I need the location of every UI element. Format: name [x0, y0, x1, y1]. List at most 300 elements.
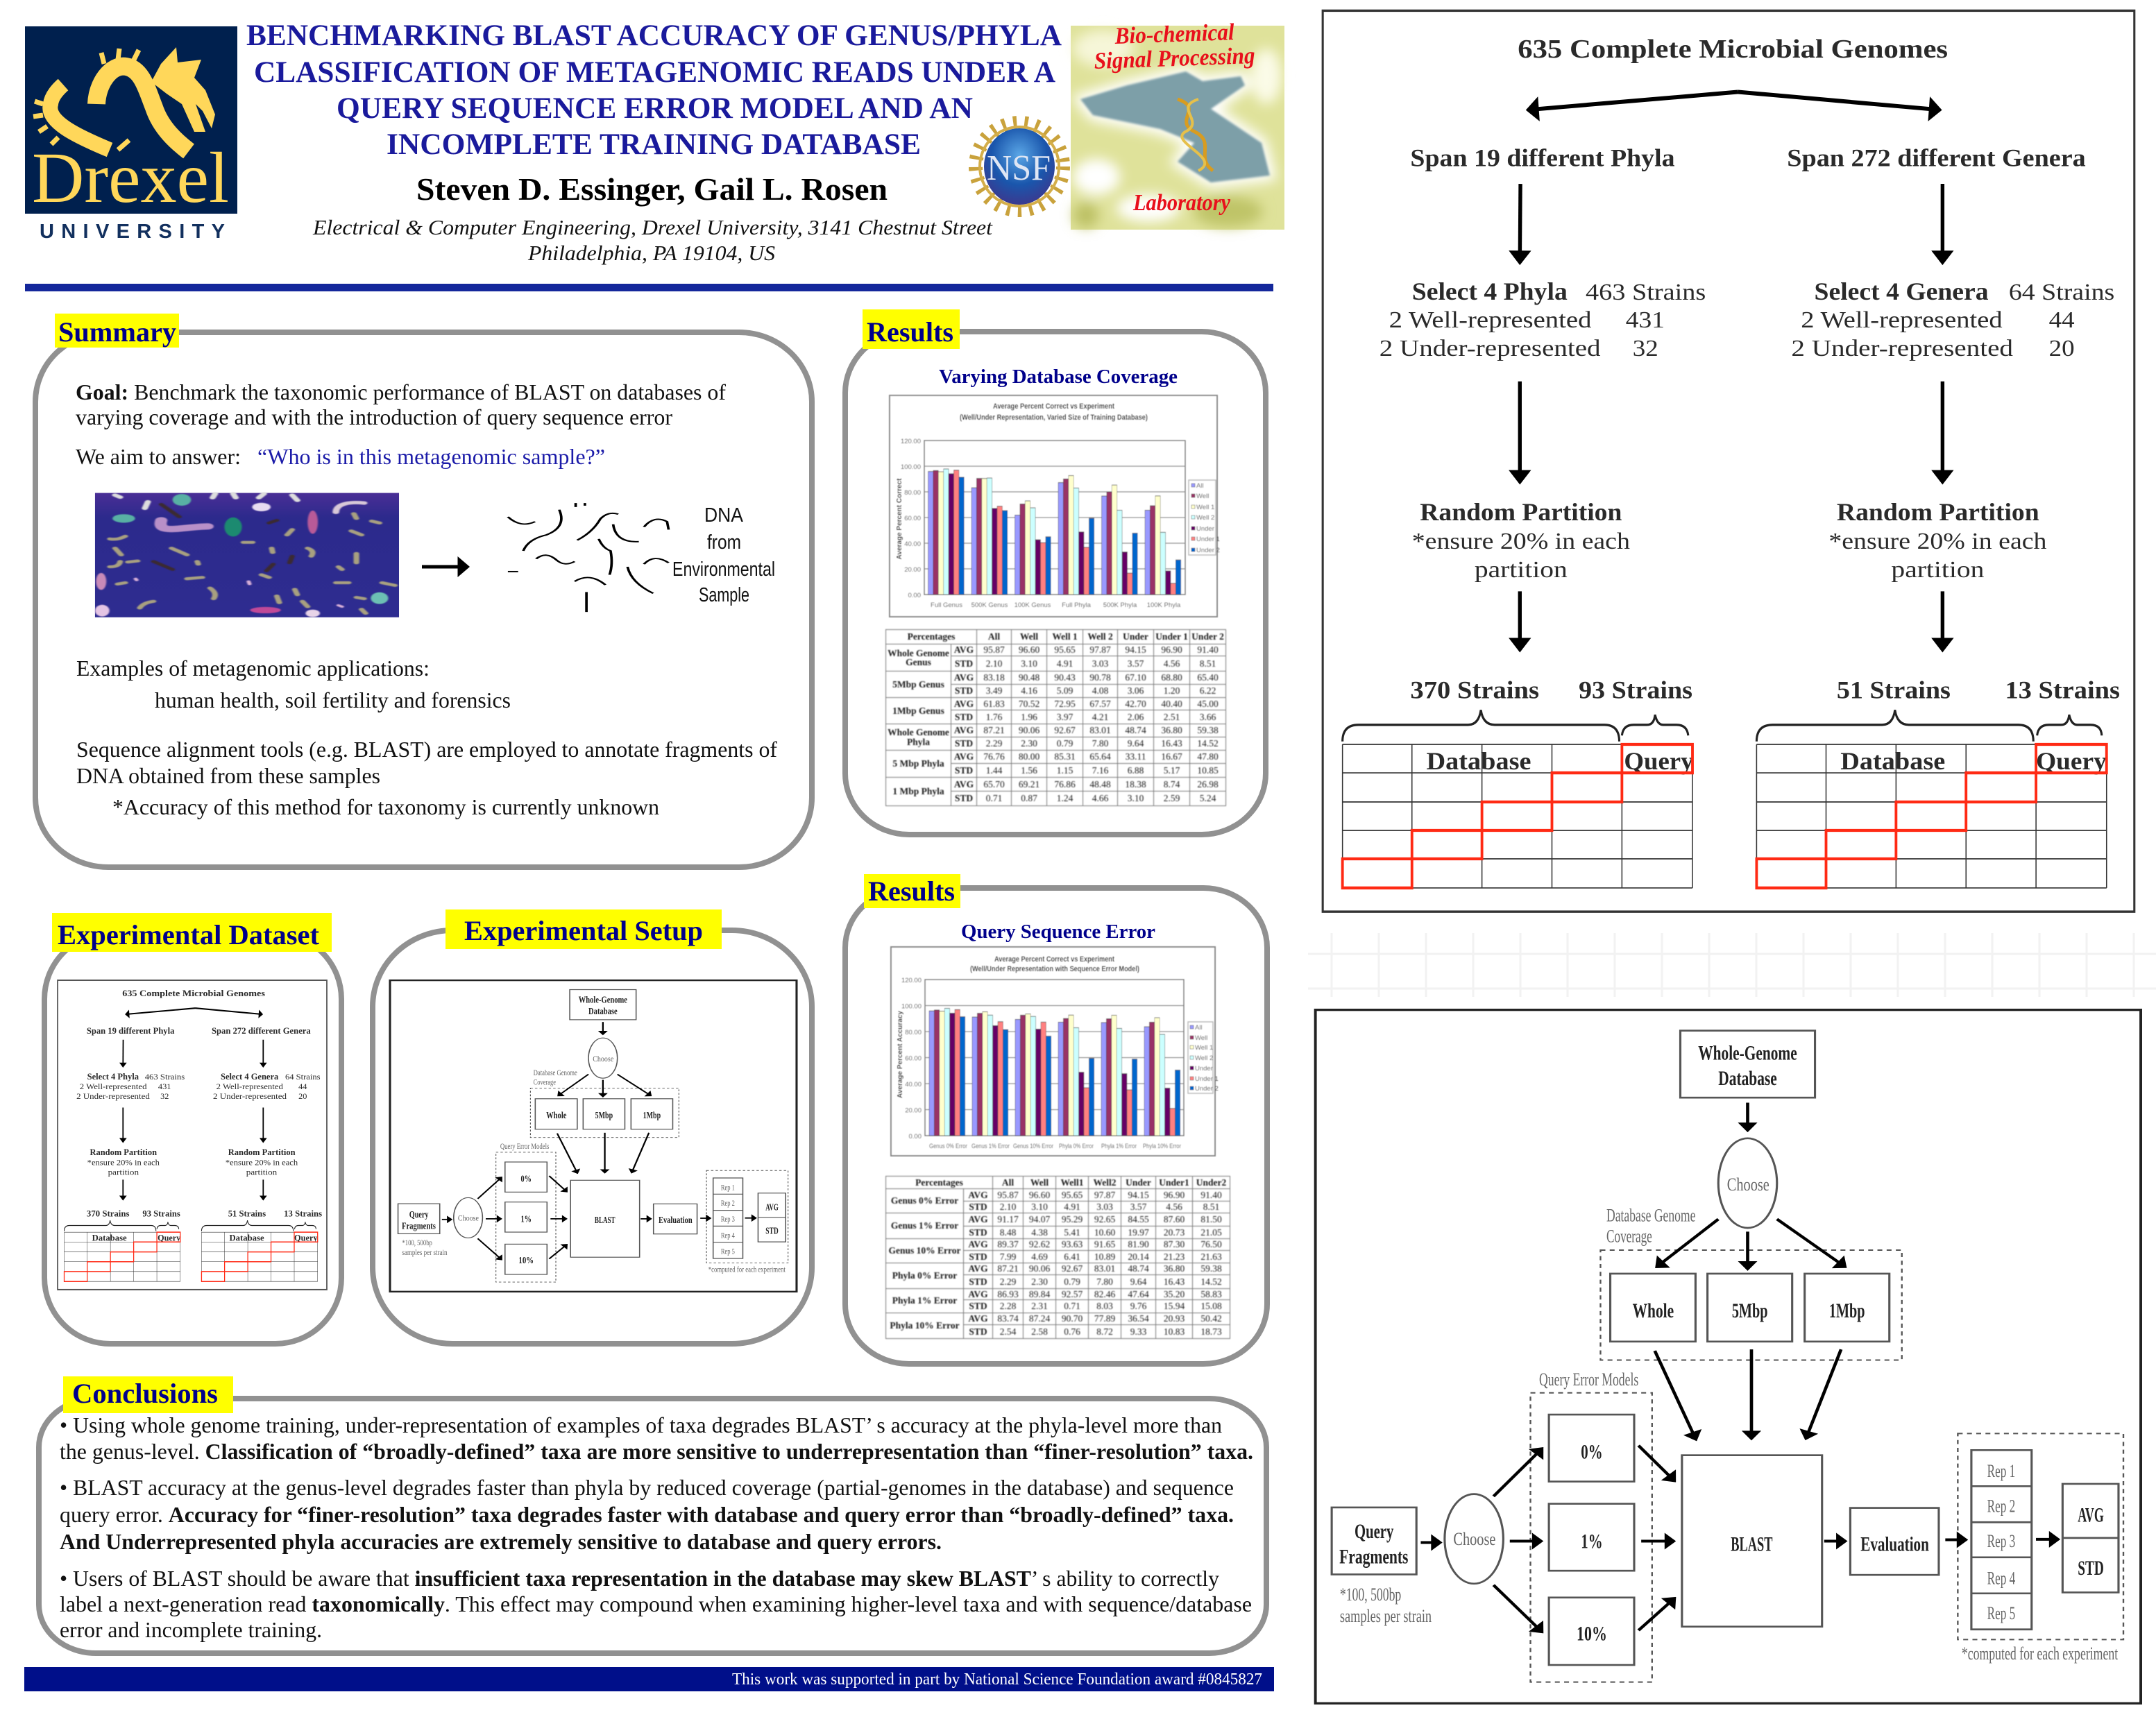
table: query sequence error results: 8.51 — [1203, 1202, 1219, 1212]
table: database coverage results: 4.16 — [1021, 685, 1037, 696]
text block: goal: “Who is in this metagenomic sample?” — [257, 444, 605, 469]
table: query sequence error results: 36.80 — [1164, 1263, 1185, 1274]
table: query sequence error results: 0.79 — [1064, 1276, 1080, 1287]
table: query sequence error results: 0.71 — [1064, 1301, 1080, 1311]
table: database coverage results: Under 1 — [1155, 631, 1188, 642]
bar chart: query sequence error — [891, 947, 1219, 1156]
table: query sequence error results: 3.10 — [1031, 1202, 1048, 1212]
table: database coverage results: 1Mbp Genus — [892, 706, 944, 716]
panel: experimental dataset — [44, 913, 341, 1344]
bar chart: database coverage — [890, 395, 1220, 617]
box labels: 1Mbp — [1829, 1300, 1865, 1322]
affiliation: Electrical & Computer Engineering, Drexel University, 3141 Chestnut Street — [312, 215, 993, 239]
diagram: setup thumbnail: *computed for each experiment — [708, 1265, 786, 1274]
diagram: setup thumbnail: Rep 4 — [721, 1231, 735, 1240]
table: query sequence error results: 2.30 — [1031, 1276, 1048, 1287]
table: query sequence error results: 20.14 — [1128, 1252, 1149, 1262]
diagram: dataset thumbnail: 32 — [160, 1092, 169, 1101]
table: query sequence error results: Phyla 0% Error — [892, 1270, 957, 1281]
table: database coverage results: 1.56 — [1021, 765, 1037, 776]
table: query sequence error results: STD — [969, 1326, 987, 1337]
bar chart: database coverage: 500K Genus — [971, 601, 1008, 609]
table: query sequence error results: 2.28 — [1000, 1301, 1016, 1311]
bar chart: database coverage: All — [1196, 482, 1204, 490]
box labels: 0% — [1581, 1441, 1603, 1463]
table: query sequence error results: 58.83 — [1200, 1289, 1222, 1299]
table: database coverage results: 2.51 — [1164, 712, 1180, 722]
bar chart: query sequence error: Under 2 — [1195, 1085, 1219, 1093]
label: DNA from environmental sample: Environmental — [672, 558, 775, 581]
bar chart: query sequence error: Genus 0% Error — [929, 1143, 967, 1150]
diagram: dataset thumbnail: Select 4 Genera — [221, 1073, 279, 1082]
table: query sequence error results: 9.76 — [1130, 1301, 1146, 1311]
bar chart: query sequence error: Genus 1% Error — [971, 1143, 1010, 1150]
diagram: dataset thumbnail: 370 Strains — [87, 1210, 130, 1218]
bold labels: 51 Strains — [1837, 677, 1951, 704]
regular labels: 32 — [1633, 336, 1658, 361]
text block: applications and tools: Examples of metagenomic applications: — [76, 656, 430, 681]
table: query sequence error results: 87.24 — [1029, 1313, 1050, 1324]
bar chart: query sequence error: (Well/Under Representation with Sequence Error Model) — [970, 965, 1139, 973]
table: query sequence error results: AVG — [968, 1263, 988, 1274]
table: database coverage results: 72.95 — [1054, 699, 1076, 709]
title — [246, 19, 1062, 161]
table: query sequence error results: 4.69 — [1031, 1252, 1048, 1262]
regular labels: 2 Well-represented — [1801, 307, 2003, 333]
table: query sequence error results: Under2 — [1196, 1177, 1226, 1188]
table: query sequence error results: 90.70 — [1062, 1313, 1083, 1324]
table: query sequence error results: 2.58 — [1031, 1326, 1048, 1337]
table: query sequence error results: 92.62 — [1029, 1239, 1050, 1249]
table: database coverage results: 42.70 — [1125, 699, 1146, 709]
bar chart: query sequence error: Phyla 10% Error — [1143, 1143, 1181, 1150]
title: CLASSIFICATION OF METAGENOMIC READS UNDER A — [254, 56, 1055, 89]
diagram: dataset thumbnail: 13 Strains — [284, 1210, 323, 1218]
table: query sequence error results: STD — [969, 1301, 987, 1311]
text block: applications and tools: Sequence alignment tools (e.g. BLAST) are employed to annotate fragments of — [76, 737, 777, 762]
bar chart: database coverage: 120.00 — [901, 438, 921, 445]
table: database coverage results: 3.49 — [986, 685, 1002, 696]
table: query sequence error results: 7.80 — [1096, 1276, 1113, 1287]
table: query sequence error results: 96.60 — [1029, 1190, 1050, 1200]
box labels: 1% — [1581, 1530, 1603, 1553]
icon: Bio-chemical Signal Processing Laboratory logo: Signal Processing — [1094, 43, 1255, 74]
header rule — [25, 284, 1273, 291]
diagram: dataset thumbnail: Random Partition — [90, 1149, 158, 1157]
table: query sequence error results: 2.29 — [1000, 1276, 1016, 1287]
grey annotations: Coverage — [1606, 1227, 1652, 1247]
table: database coverage results: 2.06 — [1128, 712, 1144, 722]
diagram: setup thumbnail: Coverage — [534, 1077, 556, 1086]
table: query sequence error results: 86.93 — [997, 1289, 1019, 1299]
table: database coverage results: 76.76 — [983, 751, 1005, 762]
box labels: BLAST — [1731, 1533, 1773, 1555]
table: database coverage results: 8.51 — [1200, 658, 1216, 669]
diagram: setup thumbnail — [390, 980, 797, 1292]
heading: results: Results — [867, 316, 953, 348]
table: database coverage results: Genus — [906, 657, 931, 667]
table: database coverage results: 45.00 — [1197, 699, 1219, 709]
diagram: setup thumbnail: Rep 5 — [721, 1247, 735, 1256]
grey annotations: Rep 3 — [1987, 1531, 2015, 1552]
icon: Bio-chemical Signal Processing Laboratory logo: Bio-chemical — [1114, 19, 1235, 49]
text block: applications and tools — [76, 656, 777, 819]
diagram: dataset thumbnail: partition — [246, 1168, 278, 1177]
table: query sequence error results: 48.74 — [1128, 1263, 1149, 1274]
icon: Bio-chemical Signal Processing Laboratory logo — [1071, 19, 1284, 230]
table: query sequence error results: 18.73 — [1200, 1326, 1222, 1337]
diagram: dataset thumbnail: 2 Under-represented — [76, 1092, 150, 1101]
table: database coverage results: 59.38 — [1197, 725, 1219, 735]
table: database coverage results: 16.43 — [1161, 738, 1182, 749]
table: database coverage results: STD — [955, 712, 973, 722]
table: query sequence error results: Well2 — [1094, 1177, 1117, 1188]
table: query sequence error results: 36.54 — [1128, 1313, 1149, 1324]
table: database coverage results: 96.60 — [1019, 644, 1039, 655]
table: query sequence error results: 4.56 — [1166, 1202, 1182, 1212]
grey annotations: Rep 1 — [1987, 1461, 2015, 1481]
table: query sequence error results: STD — [969, 1202, 987, 1212]
table: database coverage results: 85.31 — [1054, 751, 1076, 762]
table: database coverage results: AVG — [954, 779, 974, 789]
bar chart: database coverage: Well — [1196, 493, 1209, 500]
heading: experimental setup — [445, 909, 722, 949]
table: database coverage results: 67.57 — [1089, 699, 1111, 709]
table: database coverage results: 80.00 — [1019, 751, 1039, 762]
table: query sequence error results: Under — [1126, 1177, 1151, 1188]
grey annotations: Choose — [1727, 1174, 1769, 1195]
image: bacteria — [95, 493, 399, 617]
table: database coverage results: 1 Mbp Phyla — [892, 786, 944, 796]
label: DNA from environmental sample: from — [707, 531, 741, 554]
text block: applications and tools: *Accuracy of this method for taxonomy is currently unknown — [112, 794, 659, 819]
logo: Drexel University: Drexel — [32, 138, 229, 218]
table: database coverage results: AVG — [954, 699, 974, 709]
table: database coverage results: 3.66 — [1200, 712, 1216, 722]
diagram: setup thumbnail: Database Genome — [534, 1068, 577, 1077]
table: database coverage results: 83.18 — [983, 672, 1005, 683]
bar chart: database coverage: Under — [1196, 525, 1214, 533]
box labels: Fragments — [1339, 1546, 1408, 1568]
regular labels — [1380, 279, 2114, 583]
faint background grid — [1308, 933, 2156, 997]
text block: conclusions: And Underrepresented phyla accuracies are extremely sensitive to database and query errors. — [60, 1529, 942, 1554]
table: database coverage results: 3.06 — [1128, 685, 1144, 696]
table: database coverage results: 87.21 — [983, 725, 1005, 735]
table: database coverage results: 65.64 — [1089, 751, 1111, 762]
table: database coverage results: 3.03 — [1092, 658, 1108, 669]
box labels: 5Mbp — [1732, 1300, 1767, 1322]
logo: Drexel University — [25, 26, 237, 243]
text block: conclusions: the genus-level. Classification of “broadly-defined” taxa are more sensitive to underrepresentation than “finer-resolution” taxa. — [60, 1439, 1253, 1464]
panel: summary — [35, 314, 812, 867]
table: database coverage results: 47.80 — [1197, 751, 1219, 762]
diagram: dataset flow (enlarged) — [1323, 10, 2134, 912]
table: database coverage results: 90.06 — [1019, 725, 1039, 735]
table: query sequence error results: 3.03 — [1096, 1202, 1113, 1212]
bar chart: database coverage: 80.00 — [904, 489, 921, 497]
table: query sequence error results: 91.65 — [1094, 1239, 1115, 1249]
diagram: setup thumbnail: Query — [409, 1210, 429, 1220]
bar chart: database coverage: Full Phyla — [1062, 601, 1092, 609]
table: query sequence error results: 82.46 — [1094, 1289, 1115, 1299]
table: database coverage results: 7.16 — [1092, 765, 1108, 776]
diagram: dataset thumbnail: 51 Strains — [228, 1210, 266, 1218]
table: query sequence error results: Genus 0% Error — [891, 1195, 958, 1206]
table: query sequence error results: STD — [969, 1252, 987, 1262]
diagram: dataset thumbnail: 2 Well-represented — [80, 1082, 147, 1091]
heading: results: Results — [868, 875, 955, 907]
bold labels: Query — [2036, 748, 2107, 775]
text block: conclusions: • BLAST accuracy at the genus-level degrades faster than phyla by reduced coverage (partial-genomes in the database) and sequence — [60, 1475, 1234, 1500]
box labels: STD — [2078, 1557, 2104, 1580]
table: database coverage results: STD — [955, 685, 973, 696]
table: database coverage results: 6.88 — [1128, 765, 1144, 776]
table: database coverage results: 94.15 — [1125, 644, 1146, 655]
diagram: setup thumbnail: STD — [765, 1226, 779, 1236]
arrows — [1420, 1103, 2057, 1631]
table: database coverage results: AVG — [954, 751, 974, 762]
diagram: dataset thumbnail: 20 — [298, 1092, 307, 1101]
table: query sequence error results: 77.89 — [1094, 1313, 1115, 1324]
table: query sequence error results — [885, 1176, 1230, 1339]
text block: conclusions: label a next-generation read taxonomically. This effect may compound when examining higher-level taxa and with sequence/database — [60, 1591, 1252, 1616]
table: database coverage results: 16.67 — [1161, 751, 1182, 762]
bar chart: query sequence error: Under — [1195, 1065, 1213, 1073]
heading: experimental dataset: Experimental Dataset — [58, 919, 320, 950]
table: database coverage results: 8.74 — [1164, 779, 1180, 789]
table: database coverage results: 48.74 — [1125, 725, 1146, 735]
boxes — [1332, 1031, 2123, 1682]
box labels: AVG — [2078, 1504, 2104, 1526]
box labels: Whole-Genome — [1698, 1042, 1797, 1064]
table: query sequence error results: 59.38 — [1200, 1263, 1222, 1274]
table: query sequence error results: 20.73 — [1164, 1227, 1185, 1238]
table: database coverage results: 3.97 — [1057, 712, 1073, 722]
table: query sequence error results: 19.97 — [1128, 1227, 1149, 1238]
regular labels: *ensure 20% in each — [1412, 528, 1630, 554]
diagram: dataset thumbnail: Select 4 Phyla — [87, 1073, 139, 1082]
icon: NSF logo: NSF — [987, 148, 1051, 188]
table: database coverage results: 92.67 — [1054, 725, 1076, 735]
table: database coverage results: 3.10 — [1021, 658, 1037, 669]
table: query sequence error results: 81.90 — [1128, 1239, 1149, 1249]
table: database coverage results: STD — [955, 793, 973, 803]
diagram: dataset thumbnail: Query — [294, 1234, 318, 1243]
bold labels: 93 Strains — [1579, 677, 1692, 704]
table: query sequence error results: STD — [969, 1276, 987, 1287]
table: query sequence error results: 16.43 — [1164, 1276, 1185, 1287]
table: database coverage results: 4.08 — [1092, 685, 1108, 696]
bold labels: Database — [1427, 748, 1531, 775]
label: DNA from environmental sample: Sample — [699, 584, 749, 606]
table: database coverage results: 96.90 — [1161, 644, 1182, 655]
text block: applications and tools: human health, soil fertility and forensics — [155, 687, 511, 712]
diagram: setup thumbnail: Rep 3 — [721, 1214, 735, 1223]
affiliation: Philadelphia, PA 19104, US — [527, 241, 775, 265]
table: query sequence error results: AVG — [968, 1239, 988, 1249]
affiliation — [312, 215, 993, 265]
regular labels: 2 Under-represented — [1791, 336, 2013, 361]
table: query sequence error results: 3.57 — [1130, 1202, 1146, 1212]
table: query sequence error results: 5.41 — [1064, 1227, 1080, 1238]
table: database coverage results: Well — [1020, 631, 1038, 642]
bar chart: query sequence error: 0.00 — [909, 1133, 922, 1141]
text block: applications and tools: DNA obtained from these samples — [76, 763, 380, 788]
bar chart: database coverage: 100K Genus — [1015, 601, 1051, 609]
bar chart: database coverage: Full Genus — [931, 601, 962, 609]
table: query sequence error results: 2.31 — [1031, 1301, 1048, 1311]
table: query sequence error results: 92.65 — [1094, 1214, 1115, 1224]
table: database coverage results: 76.86 — [1054, 779, 1076, 789]
table: query sequence error results: 4.91 — [1064, 1202, 1080, 1212]
table: database coverage results: Whole Genome — [888, 648, 949, 658]
label: DNA from environmental sample — [672, 504, 775, 606]
table: database coverage results: Percentages — [908, 631, 955, 642]
table: query sequence error results: 15.94 — [1164, 1301, 1185, 1311]
panel: conclusions — [39, 1376, 1266, 1653]
table: database coverage results: 70.52 — [1019, 699, 1039, 709]
table: query sequence error results: Genus 10% Error — [888, 1245, 960, 1256]
table: database coverage results: AVG — [954, 725, 974, 735]
table: database coverage results: 33.11 — [1126, 751, 1146, 762]
bar chart: database coverage: 60.00 — [904, 515, 921, 522]
text block: goal: varying coverage and with the introduction of query sequence error — [76, 404, 672, 429]
bar chart: query sequence error: 80.00 — [905, 1029, 922, 1036]
table: query sequence error results: 95.87 — [997, 1190, 1019, 1200]
panel: results varying database coverage — [845, 309, 1266, 835]
table: database coverage results: 1.96 — [1021, 712, 1037, 722]
table: database coverage results: 0.71 — [986, 793, 1002, 803]
table: query sequence error results: Genus 1% Error — [891, 1220, 958, 1231]
table: database coverage results: 4.21 — [1092, 712, 1108, 722]
text block: goal — [76, 379, 726, 469]
table: query sequence error results: 83.01 — [1094, 1263, 1115, 1274]
grey annotations: Database Genome — [1606, 1206, 1695, 1226]
bold labels: 370 Strains — [1410, 677, 1539, 704]
table: query sequence error results: AVG — [968, 1214, 988, 1224]
box labels: Query — [1355, 1520, 1393, 1542]
diagram: dataset thumbnail: 431 — [158, 1082, 171, 1091]
bar chart: query sequence error: All — [1195, 1024, 1203, 1032]
diagram: setup thumbnail: BLAST — [595, 1215, 616, 1226]
table: database coverage results: 65.70 — [983, 779, 1005, 789]
diagram: setup thumbnail: Fragments — [402, 1221, 436, 1231]
table: database coverage results: 4.56 — [1164, 658, 1180, 669]
table: database coverage results: 67.10 — [1125, 672, 1146, 683]
bar chart: database coverage: (Well/Under Representation, Varied Size of Training Database) — [960, 413, 1148, 422]
text block: conclusions — [60, 1412, 1253, 1642]
bold labels: 13 Strains — [2005, 677, 2120, 704]
table: query sequence error results: 95.29 — [1062, 1214, 1083, 1224]
table: database coverage results: 91.40 — [1197, 644, 1219, 655]
table: database coverage results: Phyla — [907, 737, 930, 746]
regular labels: 2 Well-represented — [1389, 307, 1591, 333]
panel: results query sequence error — [845, 874, 1267, 1364]
table: query sequence error results: 89.84 — [1029, 1289, 1050, 1299]
regular labels: 2 Under-represented — [1380, 336, 1601, 361]
bar chart: query sequence error: Phyla 1% Error — [1101, 1143, 1137, 1150]
table: query sequence error results: AVG — [968, 1190, 988, 1200]
table: database coverage results: 2.29 — [986, 738, 1002, 749]
bar chart: query sequence error: Phyla 0% Error — [1059, 1143, 1094, 1150]
diagram: dataset thumbnail: 2 Under-represented — [213, 1092, 287, 1101]
regular labels: partition — [1475, 556, 1568, 583]
table: database coverage results: 5 Mbp Phyla — [892, 758, 944, 769]
table: database coverage results: 97.87 — [1089, 644, 1111, 655]
table: database coverage results: STD — [955, 738, 973, 749]
diagram: setup thumbnail: 1% — [521, 1214, 532, 1224]
bold labels: Random Partition — [1420, 499, 1622, 526]
table: query sequence error results: 8.72 — [1096, 1326, 1113, 1337]
table: database coverage results: 90.43 — [1054, 672, 1076, 683]
table: database coverage results: 65.40 — [1197, 672, 1219, 683]
table: database coverage results: 10.85 — [1197, 765, 1219, 776]
table: database coverage results: Under — [1123, 631, 1148, 642]
grey annotations: Rep 5 — [1987, 1603, 2015, 1624]
bar chart: query sequence error: Well 1 — [1195, 1044, 1213, 1052]
bold labels: Select 4 Phyla — [1412, 278, 1568, 305]
table: query sequence error results: 89.37 — [997, 1239, 1019, 1249]
table: query sequence error results: 92.57 — [1062, 1289, 1083, 1299]
grey annotations: Query Error Models — [1539, 1369, 1638, 1390]
grey annotations: *100, 500bp — [1340, 1584, 1401, 1605]
table: database coverage results: 3.10 — [1128, 793, 1144, 803]
box labels: Evaluation — [1860, 1533, 1929, 1555]
table: database coverage results: 95.65 — [1054, 644, 1076, 655]
table: database coverage results: AVG — [954, 672, 974, 683]
table: database coverage results: All — [988, 631, 1000, 642]
title: QUERY SEQUENCE ERROR MODEL AND AN — [337, 92, 973, 125]
bar chart: database coverage: Under 2 — [1196, 547, 1220, 554]
logo: Drexel University: UNIVERSITY — [40, 221, 225, 243]
table: database coverage results: Well 2 — [1087, 631, 1113, 642]
title: INCOMPLETE TRAINING DATABASE — [387, 128, 921, 161]
diagram: dataset thumbnail: 93 Strains — [142, 1210, 180, 1218]
diagram: setup thumbnail: *100, 500bp — [402, 1238, 432, 1247]
table: query sequence error results: 9.64 — [1130, 1276, 1146, 1287]
grey annotations: Rep 2 — [1987, 1496, 2015, 1517]
table: query sequence error results: 76.50 — [1200, 1239, 1222, 1249]
icon: DNA fragments — [508, 503, 669, 612]
table: query sequence error results: 87.30 — [1164, 1239, 1185, 1249]
bar chart: database coverage: Under 1 — [1196, 536, 1220, 543]
bar chart: database coverage: 20.00 — [904, 566, 921, 574]
heading: summary: Summary — [58, 316, 176, 348]
partition grid: genera — [1756, 710, 2107, 888]
diagram: setup thumbnail: AVG — [765, 1202, 779, 1213]
diagram: setup thumbnail: Evaluation — [659, 1215, 693, 1226]
table: database coverage results: 0.79 — [1057, 738, 1073, 749]
bar chart: database coverage: 500K Phyla — [1103, 601, 1137, 609]
table: database coverage results: 7.80 — [1092, 738, 1108, 749]
diagram: setup thumbnail: 0% — [521, 1174, 532, 1184]
footer bar: This work was supported in part by National Science Foundation award #0845827 — [732, 1671, 1262, 1689]
table: query sequence error results: Phyla 10% Error — [890, 1320, 960, 1331]
table: database coverage results: Well 1 — [1052, 631, 1078, 642]
table: query sequence error results: 96.90 — [1164, 1190, 1185, 1200]
table: query sequence error results: STD — [969, 1227, 987, 1238]
table: query sequence error results: 83.74 — [997, 1313, 1019, 1324]
regular labels: 431 — [1626, 307, 1665, 333]
partition grid: phyla — [1343, 710, 1692, 888]
subheading: Query Sequence Error — [961, 921, 1155, 943]
diagram: dataset thumbnail: Query — [158, 1234, 181, 1243]
diagram: setup thumbnail: samples per strain — [402, 1248, 448, 1257]
table: query sequence error results: 93.63 — [1062, 1239, 1083, 1249]
footer bar — [24, 1667, 1274, 1691]
bar chart: database coverage: Well 1 — [1196, 504, 1214, 511]
